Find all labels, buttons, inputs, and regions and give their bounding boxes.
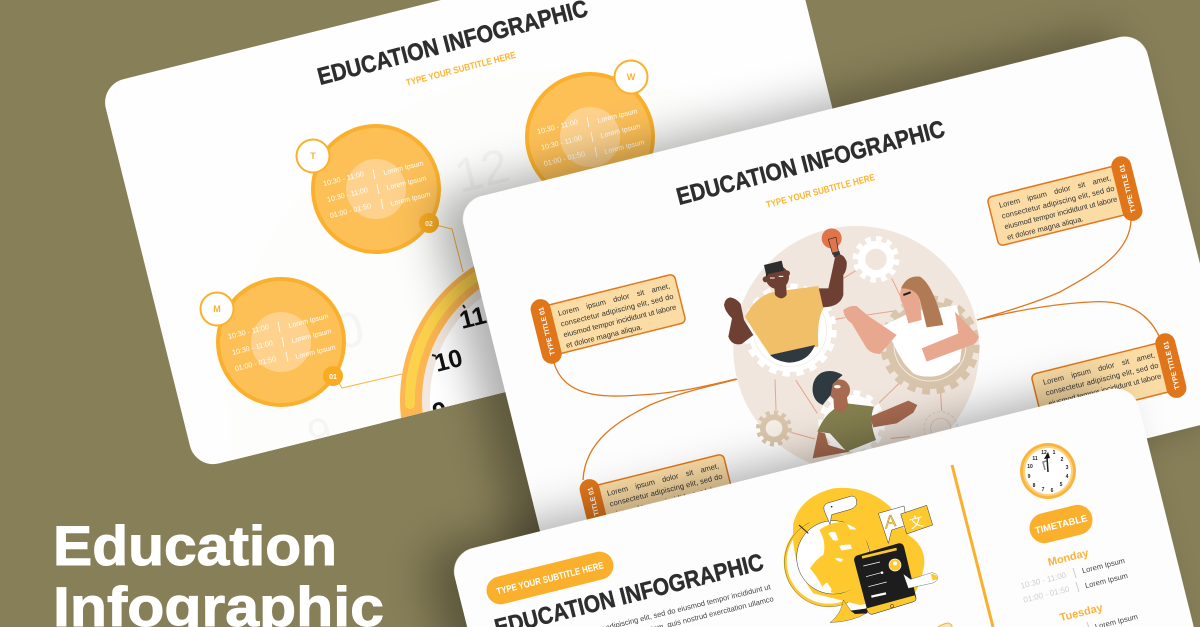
slide 2: teamwork gears bbox=[458, 31, 1200, 586]
day circle M: 10:30 - 11:00 bbox=[231, 338, 274, 357]
small clock: 8 bbox=[1033, 483, 1036, 489]
day circle M: Lorem Ipsum bbox=[291, 328, 332, 345]
text box: bottom left: consectetur adipiscing elit, sed do bbox=[609, 472, 723, 509]
connector lines bbox=[336, 224, 463, 388]
text box: right: consectetur adipiscing elit, sed do bbox=[1045, 361, 1159, 398]
text box: bottom left: TYPE TITLE 01 bbox=[587, 486, 606, 536]
text box: right: et dolore magna aliqua. bbox=[1050, 391, 1128, 419]
small clock: 1 bbox=[1053, 450, 1056, 456]
text box: bottom left: et dolore magna aliqua. bbox=[614, 502, 692, 530]
large clock: 11 bbox=[457, 301, 489, 335]
text box: bottom left bbox=[580, 454, 732, 520]
slide 2 title: EDUCATION INFOGRAPHIC bbox=[674, 116, 948, 211]
connecting curves bbox=[554, 220, 1160, 480]
day circle T bbox=[296, 126, 439, 252]
small clock: 3 bbox=[1066, 465, 1069, 471]
large clock: 10 bbox=[432, 344, 465, 378]
globe bbox=[784, 521, 870, 623]
text box: top right: et dolore magna aliqua. bbox=[1006, 214, 1084, 242]
text box: left: eiusmod tempor incididunt ut labore bbox=[562, 302, 677, 339]
schedule: Tuesday bbox=[1059, 602, 1139, 627]
text box: left: Lorem ipsum dolor sit amet, bbox=[557, 281, 671, 318]
day circle W: Lorem Ipsum bbox=[597, 108, 638, 125]
network lines bbox=[775, 271, 942, 439]
slide 1: timetable clock bbox=[105, 0, 832, 464]
text box: right: Lorem ipsum dolor sit amet, bbox=[1042, 350, 1156, 387]
globe and tablet illustration bbox=[784, 488, 938, 623]
text box: left: TYPE TITLE 01 bbox=[538, 306, 557, 356]
schedule: Monday: 10:30 - 11:00 bbox=[1020, 570, 1068, 591]
day circle W: 10:30 - 11:00 bbox=[540, 133, 583, 152]
day circle T: T bbox=[310, 151, 316, 161]
gear: outline bbox=[924, 412, 958, 436]
day circle T: 10:30 - 11:00 bbox=[326, 185, 369, 204]
day circle T: 01:00 - 01:50 bbox=[329, 201, 372, 220]
small clock: 5 bbox=[1060, 482, 1063, 488]
day circle M: 10:30 - 11:00 bbox=[227, 322, 270, 341]
text box: left: et dolore magna aliqua. bbox=[565, 322, 643, 350]
slide 2 subtitle: TYPE YOUR SUBTITLE HERE bbox=[765, 172, 876, 211]
day circle T: Lorem Ipsum bbox=[390, 191, 431, 208]
subtitle pill: TYPE YOUR SUBTITLE HERE bbox=[496, 560, 605, 598]
day circle W: 01:00 - 01:50 bbox=[543, 149, 586, 168]
small clock: 6 bbox=[1051, 488, 1054, 494]
speech bubble bbox=[824, 496, 857, 524]
timetable pill bbox=[1026, 502, 1096, 546]
small clock: 11 bbox=[1032, 456, 1038, 462]
day circle W: 10:30 - 11:00 bbox=[536, 117, 579, 136]
gear: behind woman bbox=[883, 298, 977, 392]
text box: bottom left: Lorem ipsum dolor sit amet, bbox=[606, 461, 720, 498]
day circle M: 01 bbox=[329, 374, 337, 381]
kid bbox=[813, 371, 917, 458]
faint background clock: 12 bbox=[450, 139, 514, 204]
text box: right bbox=[1031, 333, 1186, 408]
text box: top right: Lorem ipsum dolor sit amet, bbox=[998, 173, 1112, 210]
hand bbox=[903, 573, 938, 588]
gear: small tan bbox=[759, 413, 789, 444]
faint background clock: 9 bbox=[303, 407, 337, 459]
day circle T: 02 bbox=[425, 221, 433, 228]
translation cards bbox=[878, 505, 933, 543]
day circle M: Lorem Ipsum bbox=[288, 313, 329, 330]
gear: behind man bbox=[747, 287, 833, 373]
text box: top right bbox=[987, 156, 1142, 246]
small clock: 12 bbox=[1041, 450, 1047, 456]
day circle W: Lorem Ipsum bbox=[600, 123, 641, 140]
small clock: 4 bbox=[1066, 474, 1069, 480]
slide 1 subtitle: TYPE YOUR SUBTITLE HERE bbox=[405, 50, 517, 89]
text box: top right: TYPE TITLE 01 bbox=[1119, 163, 1138, 213]
small clock bbox=[1020, 443, 1076, 499]
main caption bbox=[53, 514, 384, 627]
day circle W: Lorem Ipsum bbox=[604, 139, 645, 156]
large clock bbox=[400, 266, 506, 418]
man bbox=[724, 228, 847, 363]
faint background clock: 0 bbox=[329, 300, 370, 361]
translation cards: 文 bbox=[907, 511, 925, 534]
schedule: Tuesday: Tuesday bbox=[1059, 602, 1105, 624]
schedule: Monday: Lorem Ipsum bbox=[1081, 556, 1126, 575]
woman bbox=[843, 276, 978, 376]
day circle M: 01:00 - 01:50 bbox=[234, 354, 277, 373]
schedule: Monday: Monday bbox=[1047, 547, 1091, 569]
day circle W: W bbox=[627, 72, 636, 82]
tablet bbox=[854, 543, 916, 614]
faint background clock bbox=[234, 150, 509, 460]
small clock: 2 bbox=[1061, 457, 1064, 463]
text box: right: eiusmod tempor incididunt ut labore bbox=[1047, 371, 1162, 408]
divider line bbox=[952, 465, 993, 627]
text box: right: TYPE TITLE 01 bbox=[1163, 340, 1182, 390]
day circle M bbox=[200, 279, 344, 405]
schedule: Monday: Lorem Ipsum bbox=[1084, 571, 1129, 590]
small orange card corner bbox=[938, 623, 952, 627]
day circle T: Lorem Ipsum bbox=[383, 160, 424, 177]
schedule: Monday bbox=[1020, 547, 1129, 605]
small clock: 10 bbox=[1027, 464, 1033, 470]
gear: behind kid bbox=[822, 393, 882, 453]
timetable pill: TIMETABLE bbox=[1034, 513, 1089, 537]
main caption: Education bbox=[53, 514, 337, 577]
small clock: 9 bbox=[1028, 474, 1031, 480]
day circle M: M bbox=[213, 304, 221, 314]
people and gears illustration bbox=[724, 226, 979, 472]
gear: top right bbox=[856, 239, 896, 279]
large clock: 9 bbox=[430, 396, 450, 427]
translation cards: A bbox=[881, 510, 898, 532]
schedule: Monday: 01:00 - 01:50 bbox=[1022, 584, 1071, 605]
small clock: 7 bbox=[1042, 487, 1045, 493]
text box: bottom left: eiusmod tempor incididunt ut labore bbox=[611, 482, 726, 519]
text box: top right: consectetur adipiscing elit, sed do bbox=[1001, 184, 1115, 221]
day circle T: 10:30 - 11:00 bbox=[322, 169, 365, 188]
subtitle pill bbox=[484, 549, 616, 607]
slide 3: timetable overview bbox=[449, 383, 1200, 627]
day circle W bbox=[525, 60, 655, 181]
day circle M: Lorem Ipsum bbox=[295, 344, 336, 361]
day circle T: Lorem Ipsum bbox=[386, 175, 427, 192]
text box: top right: eiusmod tempor incididunt ut labore bbox=[1003, 194, 1118, 231]
text box: left: consectetur adipiscing elit, sed do bbox=[560, 292, 674, 329]
text box: left bbox=[530, 274, 686, 364]
